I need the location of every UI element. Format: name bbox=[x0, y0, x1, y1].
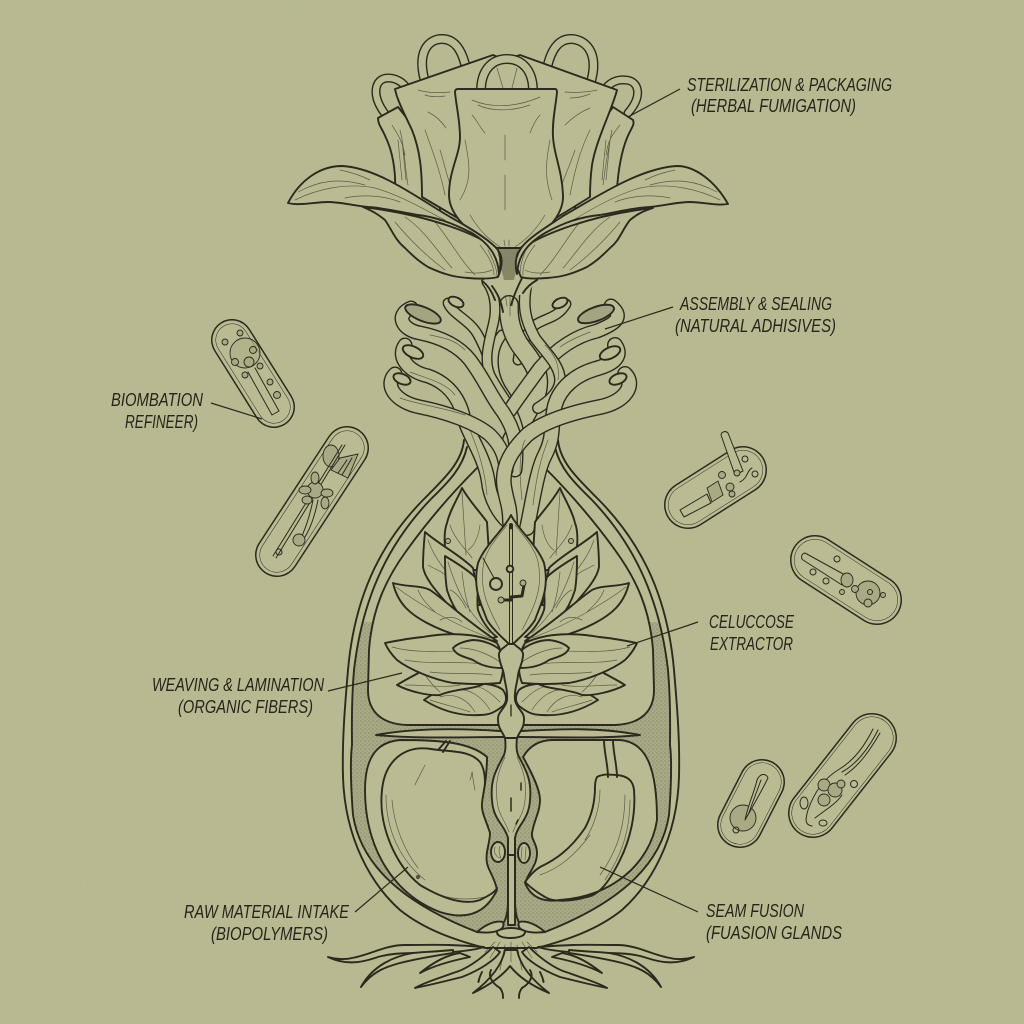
central pod bbox=[446, 515, 574, 655]
apple bbox=[381, 741, 497, 902]
label: raw material intake: RAW MATERIAL INTAKE bbox=[184, 902, 350, 922]
bottle body bbox=[343, 440, 679, 948]
outer bottle wall bbox=[343, 440, 679, 948]
label: raw material intake bbox=[184, 902, 350, 944]
front handle bbox=[481, 59, 533, 91]
leader: seam fusion bbox=[600, 867, 698, 912]
tube: small upper curl right bbox=[518, 296, 569, 360]
back handle left bbox=[422, 39, 466, 85]
left lower chamber bbox=[365, 740, 497, 916]
upper leaf left bbox=[288, 166, 500, 274]
central bulb and column bbox=[492, 722, 530, 930]
label: weaving and lamination: WEAVING & LAMINATION bbox=[152, 675, 325, 695]
outer petal right bbox=[575, 107, 634, 220]
wing upper bbox=[385, 634, 503, 684]
label: raw material intake: (BIOPOLYMERS) bbox=[211, 924, 328, 944]
neck shading bbox=[498, 249, 520, 280]
flower bbox=[288, 39, 728, 280]
leader: celuccose bbox=[627, 622, 698, 646]
capsule: right middle bbox=[802, 553, 886, 607]
label: biombation refineer bbox=[111, 390, 204, 432]
label: weaving and lamination: (ORGANIC FIBERS) bbox=[178, 697, 313, 717]
label: celuccose extractor bbox=[709, 612, 795, 654]
leaf cluster right bbox=[516, 488, 637, 715]
small handle left bbox=[376, 78, 405, 115]
inner bottle wall bbox=[351, 447, 671, 932]
roots bbox=[328, 942, 694, 998]
label: assembly and sealing: ASSEMBLY & SEALING bbox=[679, 294, 832, 314]
banana bbox=[525, 740, 634, 901]
leaf top bbox=[445, 488, 490, 570]
label: celuccose extractor: CELUCCOSE bbox=[709, 612, 795, 632]
stem collar lines bbox=[482, 278, 537, 312]
label: biombation refineer: REFINEER) bbox=[125, 412, 198, 432]
tube: large curl right bbox=[510, 306, 617, 410]
tube: small upper curl left bbox=[447, 295, 492, 375]
right lower chamber bbox=[523, 740, 657, 901]
leader: assembly bbox=[605, 307, 673, 329]
label: weaving and lamination bbox=[152, 675, 325, 717]
label: assembly and sealing: (NATURAL ADHISIVES) bbox=[675, 316, 836, 336]
tube: central body bbox=[509, 305, 538, 440]
horizontal membrane bbox=[376, 729, 640, 738]
tube: large curl left bbox=[402, 308, 516, 470]
label: celuccose extractor: EXTRACTOR bbox=[710, 634, 793, 654]
central knot column bbox=[498, 644, 524, 738]
label: sterilization and packaging: STERILIZATION & PACKAGING bbox=[687, 75, 892, 95]
leader: raw material bbox=[355, 867, 408, 912]
label: seam fusion bbox=[706, 901, 842, 943]
lower leaf shading bbox=[395, 217, 620, 276]
second petal bbox=[395, 55, 617, 240]
upper chamber fill bbox=[368, 468, 654, 725]
tube: inner thin strand bbox=[493, 335, 517, 445]
leader: weaving bbox=[328, 673, 402, 691]
label: seam fusion: SEAM FUSION bbox=[706, 901, 805, 921]
wing small bbox=[453, 640, 502, 668]
tube: mid curl right bbox=[527, 345, 618, 528]
leaf second bbox=[423, 532, 480, 607]
upper leaf veins bbox=[295, 170, 720, 222]
capsule: lower small bbox=[730, 774, 768, 833]
small handle right bbox=[606, 80, 638, 113]
upper leaf right bbox=[516, 166, 728, 274]
stem collar fill bbox=[482, 274, 537, 295]
tube head: low right bbox=[608, 371, 628, 387]
upper chamber outline bbox=[368, 468, 654, 725]
tube head: mid right bbox=[598, 343, 622, 363]
tube: mid curl left bbox=[402, 345, 508, 522]
label: biombation refineer: BIOMBATION bbox=[111, 390, 204, 410]
label: assembly and sealing bbox=[675, 294, 836, 336]
tube head: large right bbox=[576, 301, 616, 327]
capsule: biombation refiner bbox=[222, 330, 280, 415]
tube head: large left bbox=[403, 300, 443, 328]
tube: low curl right bbox=[504, 374, 629, 522]
leader: sterilization bbox=[628, 89, 680, 117]
capsule: left lower bbox=[273, 445, 358, 558]
label: sterilization and packaging bbox=[687, 75, 892, 116]
capsule: right upper bbox=[680, 432, 758, 517]
tube shading bbox=[400, 292, 590, 505]
lower leaf left bbox=[363, 207, 502, 279]
tube head: mid left bbox=[401, 342, 425, 362]
label: sterilization and packaging: (HERBAL FUMIGATION) bbox=[691, 96, 856, 116]
outer petal left bbox=[378, 107, 440, 220]
branching tubes bbox=[391, 274, 629, 528]
front petal bbox=[449, 89, 563, 248]
leaf cluster left bbox=[385, 488, 506, 715]
wing lower bbox=[424, 683, 506, 715]
wing middle bbox=[397, 670, 490, 695]
front petal shading bbox=[460, 97, 552, 247]
gland eyes bbox=[491, 842, 530, 863]
tube: right stem strand bbox=[525, 282, 560, 408]
leader: biombation bbox=[211, 403, 262, 419]
leaf third bbox=[445, 556, 497, 640]
outer petal shading bbox=[392, 125, 620, 185]
tube: low curl left bbox=[391, 374, 506, 470]
back handle right bbox=[547, 39, 593, 85]
capsule: lower large bbox=[800, 729, 880, 826]
stippled tissue band bbox=[352, 622, 670, 931]
label: seam fusion: (FUASION GLANDS bbox=[706, 923, 842, 943]
leaf wide bbox=[393, 583, 497, 641]
second petal shading bbox=[418, 90, 597, 195]
lower leaf right bbox=[516, 208, 653, 279]
tube: left stem strand bbox=[487, 282, 518, 428]
tube head: low left bbox=[392, 371, 412, 387]
base plate bbox=[477, 922, 545, 938]
